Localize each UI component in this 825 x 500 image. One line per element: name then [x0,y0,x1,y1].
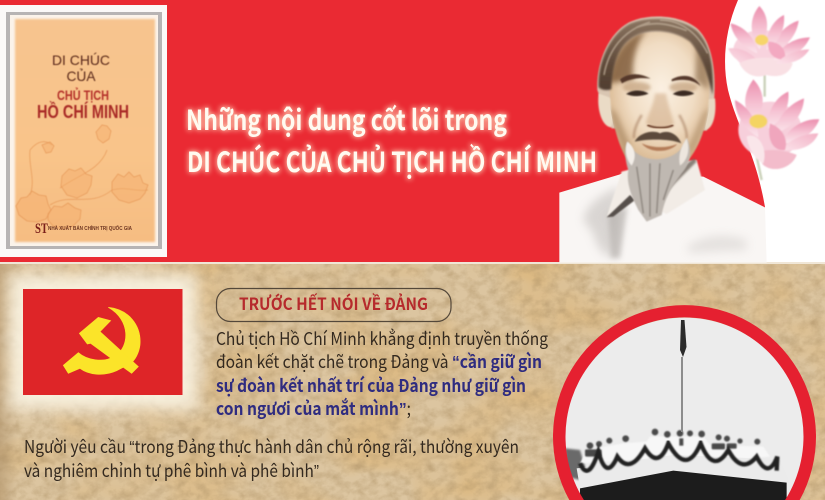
book title: HỒ CHÍ MINH [37,101,129,122]
hammer and sickle [63,307,140,374]
section heading pill [216,288,451,322]
trees at left [565,448,585,480]
photo backdrop [565,318,805,500]
party flag [23,289,182,395]
body paragraph two: Người yêu cầu “trong Đảng thực hành dân chủ rộng rãi, thường xuyên [24,434,519,459]
portrait of President Ho Chi Minh [559,16,767,263]
book cover [0,5,167,257]
body paragraph two: và nghiêm chỉnh tự phê bình và phê bình” [24,458,319,483]
book publisher: NHÀ XUẤT BẢN CHÍNH TRỊ QUỐC GIA [48,224,132,232]
body paragraph one: con ngươi của mắt mình”; [216,396,411,421]
neck shadow [668,158,697,190]
flagpole and flag [680,320,686,432]
section heading pill: TRƯỚC HẾT NÓI VỀ ĐẢNG [239,291,428,315]
jacket shading [583,187,747,258]
face [609,32,709,167]
garlands [580,443,777,471]
book title [37,52,129,122]
sickle [63,307,140,374]
crowd figures [585,429,760,457]
eye sockets [623,82,697,93]
ears [598,93,616,127]
book publisher [35,221,132,237]
mouth [642,143,677,151]
headline: Những nội dung cốt lõi trong [186,99,507,139]
book lotus drawing [16,125,148,229]
facial shading [608,30,710,157]
hammer [79,317,138,373]
red ring [553,305,816,500]
crowd shirts [580,437,770,463]
lotus flowers [728,6,819,180]
eyes [626,90,649,96]
circular photo: flag raising at the rostrum [553,305,816,500]
headline: DI CHÚC CỦA CHỦ TỊCH HỒ CHÍ MINH [187,141,597,181]
grey hair streaks [604,20,708,75]
upper lotus [728,6,810,76]
moustache [635,132,681,143]
goatee [625,138,690,222]
hair [599,19,713,95]
book publisher: ST [35,221,48,237]
body paragraph two [24,434,519,483]
body paragraph one [216,326,548,421]
eyebrows [620,74,651,83]
book title: CỦA [66,67,96,84]
lower lotus [735,79,819,169]
collar [607,160,705,217]
book title: DI CHÚC [52,52,110,68]
head halo [597,16,715,131]
rostrum white face [576,455,747,481]
body paragraph one: sự đoàn kết nhất trí của Đảng như giữ gìn [216,373,526,398]
rostrum dark base [580,471,787,500]
book title: CHỦ TỊCH [57,88,109,103]
photo content [565,429,790,500]
book page [15,19,155,242]
body paragraph one: đoàn kết chặt chẽ trong Đảng và “cần giữ gìn [216,349,542,374]
nose [646,93,674,128]
paper background [0,263,825,500]
stems [757,75,765,180]
white jacket [559,173,767,263]
headline [186,99,597,181]
body paragraph one: Chủ tịch Hồ Chí Minh khẳng định truyền thống [216,326,548,351]
red banner [0,0,825,264]
